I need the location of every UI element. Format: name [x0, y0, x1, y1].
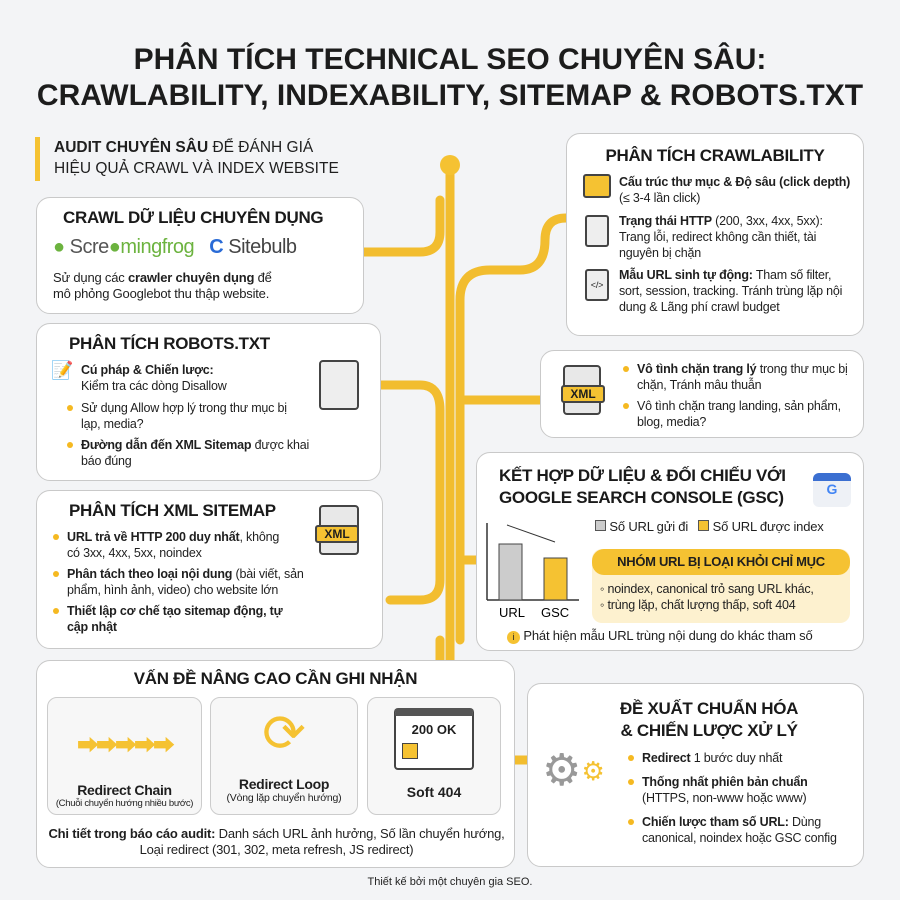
panel: recommendations: Thống nhất phiên bản chuẩn (HTTPS, non-www hoặc www) — [642, 775, 808, 805]
panel: xml sitemap: PHÂN TÍCH XML SITEMAP — [69, 501, 276, 520]
subtitle — [35, 137, 365, 181]
card: redirect chain: ➡➡➡➡➡ — [77, 733, 172, 758]
item: url pattern: Mẫu URL sinh tự động: Tham số filter, sort, session, tracking. Tránh trùng lặp nội dung & Lãng phí crawl budget — [619, 268, 842, 314]
panel: robots: PHÂN TÍCH ROBOTS.TXT — [69, 334, 270, 353]
panel: recommendations — [527, 683, 864, 867]
panel: xml sitemap: URL trả về HTTP 200 duy nhất, không có 3xx, 4xx, 5xx, noindex — [67, 530, 279, 560]
panel: crawl data: Sử dụng các crawler chuyên dụng để — [53, 270, 272, 285]
panel: robots: Đường dẫn đến XML Sitemap được khai báo đúng — [81, 438, 309, 468]
panel: GSC: KẾT HỢP DỮ LIỆU & ĐỐI CHIẾU VỚI — [499, 466, 786, 485]
card: redirect chain: Redirect Chain — [77, 782, 172, 798]
card: redirect loop: (Vòng lặp chuyển hướng) — [226, 792, 341, 804]
bar chart — [486, 523, 579, 620]
bar chart: GSC — [541, 605, 569, 620]
icon: XML: XML — [570, 387, 596, 401]
panel: advanced issues: Chi tiết trong báo cáo audit: Danh sách URL ảnh hưởng, Số lần chuyển hướng, Loại redirect (301, 302, meta refresh, JS redirect) — [48, 826, 505, 857]
logos: ● Scre●mingfrog C Sitebulb — [53, 236, 297, 258]
legend: Số URL gửi đi Số URL được index — [609, 519, 824, 534]
panel: GSC: GOOGLE SEARCH CONSOLE (GSC) — [499, 488, 784, 507]
panel: robots blocking: Vô tình chặn trang lý trong thư mục bị chặn, Tránh mâu thuẫn — [637, 362, 848, 392]
card: soft 404: Soft 404 — [407, 784, 461, 800]
panel: robots blocking — [540, 350, 864, 438]
panel: recommendations: Chiến lược tham số URL: Dùng canonical, noindex hoặc GSC config — [642, 815, 837, 845]
title: PHÂN TÍCH TECHNICAL SEO CHUYÊN SÂU: — [134, 43, 766, 76]
callout: excluded — [592, 549, 850, 623]
panel: xml sitemap: Thiết lập cơ chế tạo sitemap động, tự cập nhật — [67, 604, 282, 634]
icon: document — [319, 360, 359, 410]
panel: crawlability: PHÂN TÍCH CRAWLABILITY — [605, 146, 825, 165]
icon: gears: ⚙⚙ — [542, 746, 605, 795]
panel: crawl data: mô phỏng Googlebot thu thập website. — [53, 286, 269, 301]
panel: crawl data — [36, 197, 364, 314]
card: redirect loop: ⟳ — [262, 705, 306, 763]
panel: robots: Kiểm tra các dòng Disallow — [81, 379, 227, 393]
panel: robots: 📝 — [51, 360, 73, 380]
panel: GSC: i — [513, 632, 514, 642]
panel: advanced issues: VẤN ĐỀ NÂNG CAO CẦN GHI NHẬN — [134, 669, 417, 688]
subtitle: AUDIT CHUYÊN SÂU ĐỂ ĐÁNH GIÁ — [54, 139, 313, 156]
item: folder: Cấu trúc thư mục & Độ sâu (click depth) (≤ 3-4 lần click) — [619, 175, 850, 205]
bar chart: URL — [499, 605, 525, 620]
icon: gsc: G — [827, 481, 837, 497]
panel: advanced issues — [36, 660, 515, 868]
panel: robots: Cú pháp & Chiến lược: — [81, 363, 214, 377]
panel: recommendations: & CHIẾN LƯỢC XỬ LÝ — [621, 721, 798, 740]
title: CRAWLABILITY, INDEXABILITY, SITEMAP & ROBOTS.TXT — [37, 79, 863, 112]
panel: xml sitemap: Phân tách theo loại nội dung (bài viết, sản phẩm, hình ảnh, video) cho website lớn — [67, 567, 304, 597]
card: soft 404: 200 OK — [412, 722, 456, 737]
item: http: Trạng thái HTTP (200, 3xx, 4xx, 5xx): Trang lỗi, redirect không cần thiết, tài nguyên bị chặn — [619, 214, 823, 260]
title — [37, 42, 863, 112]
card: redirect chain — [47, 697, 202, 815]
card: redirect loop: Redirect Loop — [239, 776, 329, 792]
footer: Thiết kế bởi một chuyên gia SEO. — [368, 876, 532, 888]
icon: XML — [563, 365, 601, 415]
panel: recommendations: Redirect 1 bước duy nhất — [642, 751, 782, 765]
card: soft 404 — [367, 697, 501, 815]
card: redirect chain: (Chuỗi chuyển hướng nhiều bước) — [56, 798, 193, 809]
subtitle: HIỆU QUẢ CRAWL VÀ INDEX WEBSITE — [54, 160, 339, 177]
callout: excluded: NHÓM URL BỊ LOẠI KHỎI CHỈ MỤC — [617, 554, 825, 569]
icon: gsc — [813, 473, 851, 507]
panel: crawlability — [566, 133, 864, 336]
panel: recommendations: ĐỀ XUẤT CHUẨN HÓA — [620, 699, 798, 718]
panel: robots — [36, 323, 381, 481]
panel: GSC — [476, 452, 864, 651]
panel: crawl data: CRAWL DỮ LIỆU CHUYÊN DỤNG — [63, 208, 323, 227]
callout: excluded: ◦ trùng lặp, chất lượng thấp, soft 404 — [600, 598, 795, 612]
panel: robots blocking: Vô tình chặn trang landing, sản phẩm, blog, media? — [637, 399, 841, 429]
item: url pattern: </> — [591, 280, 603, 290]
panel: robots: Sử dụng Allow hợp lý trong thư mục bị lạp, media? — [81, 401, 287, 431]
panel: xml sitemap — [36, 490, 383, 649]
icon: XML file: XML — [324, 527, 350, 541]
card: redirect loop — [210, 697, 358, 815]
panel: GSC: Phát hiện mẫu URL trùng nội dung do khác tham số — [523, 628, 813, 643]
icon: XML file — [319, 505, 359, 555]
callout: excluded: ◦ noindex, canonical trỏ sang URL khác, — [600, 582, 814, 596]
